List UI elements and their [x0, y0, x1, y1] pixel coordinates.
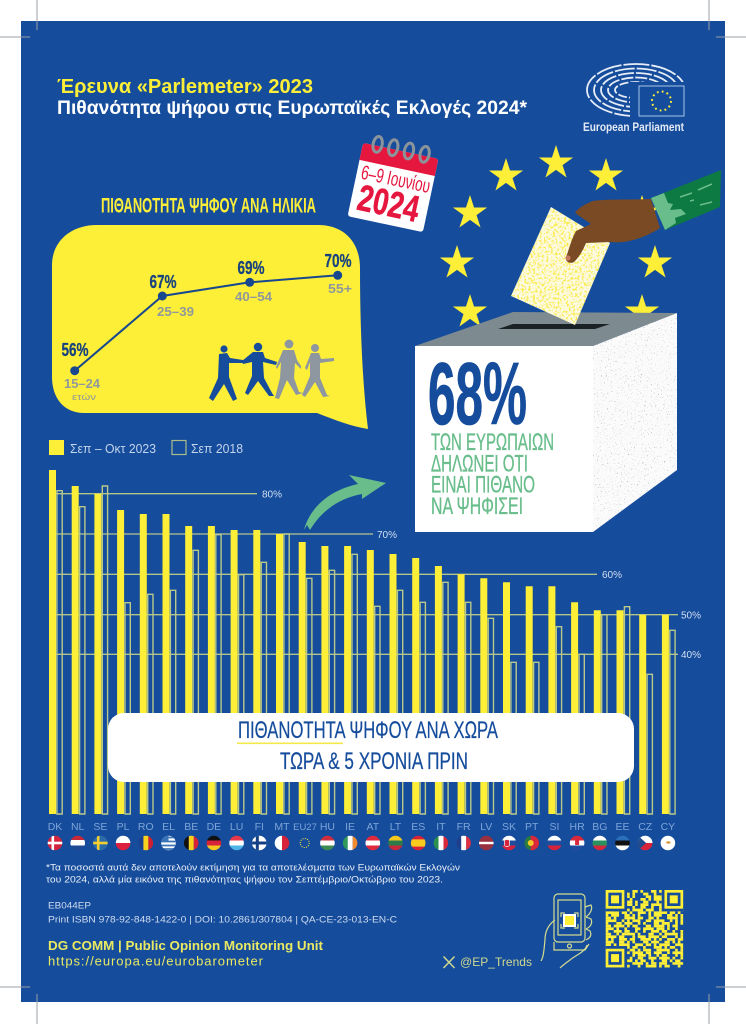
- country labels: EU27: [293, 822, 317, 833]
- country labels: SK: [502, 821, 516, 833]
- bar: PT: [526, 586, 539, 814]
- icon: walking people: [209, 340, 334, 401]
- bar: BG: [594, 610, 607, 814]
- heading: age: ΠΙΘΑΝΟΤΗΤΑ ΨΗΦΟΥ ΑΝΑ ΗΛΙΚΙΑ: [101, 195, 316, 218]
- publication references: [48, 901, 398, 924]
- footnote: *Τα ποσοστά αυτά δεν αποτελούν εκτίμηση για τα αποτελέσματα των Ευρωπαϊκών Εκλογών: [46, 863, 460, 874]
- bar: SE: [94, 486, 108, 814]
- credits: https://europa.eu/eurobarometer: [48, 954, 264, 969]
- bar: NL: [72, 486, 85, 814]
- line chart: vote by age: 40–54: [235, 290, 272, 304]
- country labels: PT: [525, 821, 539, 833]
- country labels: DE: [207, 821, 221, 833]
- country labels: FR: [457, 821, 471, 833]
- grid lines: 50%: [681, 610, 701, 622]
- bar: AT: [367, 550, 380, 814]
- country labels: BG: [592, 821, 607, 833]
- bar: LV: [480, 578, 494, 814]
- country labels: IE: [345, 821, 355, 833]
- box caption: ΤΩΝ ΕΥΡΩΠΑΙΩΝ: [431, 429, 554, 456]
- icon: ballot paper: [511, 207, 610, 325]
- country labels: AT: [366, 821, 380, 833]
- line chart: vote by age: 69%: [238, 258, 264, 278]
- country labels: IT: [436, 821, 446, 833]
- logo: European Parliament: [583, 64, 690, 134]
- line chart: vote by age: 15–24: [64, 377, 100, 391]
- box caption: ΕΙΝΑΙ ΠΙΘΑΝΟ: [431, 472, 535, 499]
- banner: country heading: ΠΙΘΑΝΟΤΗΤΑ ΨΗΦΟΥ ΑΝΑ ΧΩΡΑ: [238, 717, 498, 744]
- country labels: HR: [570, 821, 585, 833]
- bar: EE: [616, 607, 630, 814]
- publication references: EB044EP: [48, 901, 91, 911]
- logo: European Parliament: European Parliament: [583, 120, 684, 134]
- bar: SI: [548, 586, 562, 814]
- country labels: [48, 821, 675, 833]
- bar: DK: [49, 470, 62, 814]
- country labels: NL: [71, 821, 85, 833]
- box caption: [431, 429, 554, 520]
- line chart: vote by age: 55+: [328, 282, 352, 296]
- country labels: EE: [615, 821, 630, 833]
- bar: ES: [412, 558, 425, 814]
- line chart: vote by age: 56%: [62, 340, 88, 360]
- country labels: LV: [480, 821, 492, 833]
- bar: RO: [140, 514, 153, 814]
- panel: age speech bubble: [52, 225, 368, 429]
- country labels: DK: [48, 821, 62, 833]
- bar: IE: [344, 546, 357, 814]
- bar: HU: [321, 546, 335, 814]
- bar: MT: [276, 534, 289, 814]
- icon: phone in hand: [541, 894, 592, 968]
- bar: LT: [390, 554, 403, 814]
- bar: BE: [185, 526, 198, 814]
- bar: CY: [662, 615, 675, 814]
- banner: country heading: [108, 713, 634, 782]
- country labels: LT: [390, 821, 402, 833]
- grid lines: 80%: [262, 490, 282, 500]
- big number: 68%: [428, 344, 527, 443]
- box caption: ΔΗΛΩΝΕΙ ΟΤΙ: [431, 451, 528, 478]
- box caption: ΝΑ ΨΗΦΙΣΕΙ: [431, 493, 523, 520]
- country labels: CY: [661, 821, 675, 833]
- bar: EL: [162, 514, 176, 814]
- bar: CZ: [639, 615, 652, 814]
- line chart: vote by age: 67%: [150, 272, 176, 292]
- country labels: SE: [93, 821, 107, 833]
- country flags: [47, 835, 676, 851]
- credits: DG COMM | Public Opinion Monitoring Unit: [48, 938, 324, 953]
- social handle: @EP_Trends: [460, 955, 532, 969]
- banner: country heading: ΤΩΡΑ & 5 ΧΡΟΝΙΑ ΠΡΙΝ: [280, 748, 468, 775]
- credits: [48, 938, 324, 969]
- country labels: FI: [255, 821, 264, 833]
- country labels: BE: [184, 821, 198, 833]
- title: [57, 75, 528, 119]
- bar: FR: [458, 574, 471, 814]
- bar: PL: [117, 510, 130, 814]
- legend: Σεπ – Οκτ 2023: [70, 442, 156, 456]
- grid lines: 70%: [377, 530, 397, 541]
- grid lines: 40%: [681, 650, 701, 661]
- line chart: vote by age: 25–39: [157, 305, 194, 319]
- country labels: RO: [138, 821, 154, 833]
- bar: IT: [435, 566, 448, 814]
- bar: DE: [208, 526, 221, 814]
- grid lines: [50, 490, 701, 661]
- publication references: Print ISBN 978-92-848-1422-0 | DOI: 10.2861/307804 | QA-CE-23-013-EN-C: [48, 914, 398, 924]
- country labels: MT: [274, 821, 290, 833]
- icon: EU star circle: [440, 145, 672, 327]
- icon: calendar: [348, 134, 440, 232]
- legend: Σεπ 2018: [191, 442, 243, 456]
- icon: hand and sleeve: [565, 170, 721, 263]
- footnote: [46, 863, 460, 886]
- bar: SK: [503, 582, 516, 814]
- line chart: vote by age: [62, 251, 352, 402]
- country labels: CZ: [638, 821, 653, 833]
- icon: calendar: 6–9 Ιουνίου: [359, 162, 432, 198]
- grid lines: 60%: [602, 570, 622, 581]
- country labels: HU: [320, 821, 335, 833]
- country labels: PL: [117, 821, 130, 833]
- bar: EU27: [299, 542, 312, 814]
- QR code: [606, 890, 683, 967]
- bar chart: [49, 470, 701, 814]
- footnote: του 2024, αλλά μία εικόνα της πιθανότητας ψήφου τον Σεπτέμβριο/Οκτώβριο του 2023.: [46, 875, 443, 886]
- bar: FI: [253, 530, 266, 814]
- bar: LU: [231, 530, 244, 814]
- country labels: ES: [411, 821, 425, 833]
- country labels: LU: [230, 821, 243, 833]
- country labels: EL: [162, 821, 175, 833]
- title: Πιθανότητα ψήφου στις Ευρωπαϊκές Εκλογές 2024*: [57, 98, 528, 119]
- line chart: vote by age: 70%: [324, 251, 352, 271]
- legend: [49, 440, 243, 456]
- line chart: vote by age: ετών: [72, 392, 97, 402]
- country labels: SI: [549, 821, 559, 833]
- illustration: ballot box: [415, 312, 677, 532]
- title: Έρευνα «Parlemeter» 2023: [57, 75, 313, 98]
- icon: calendar: 2024: [354, 177, 423, 230]
- bar: HR: [571, 602, 584, 814]
- arrow: [304, 475, 386, 530]
